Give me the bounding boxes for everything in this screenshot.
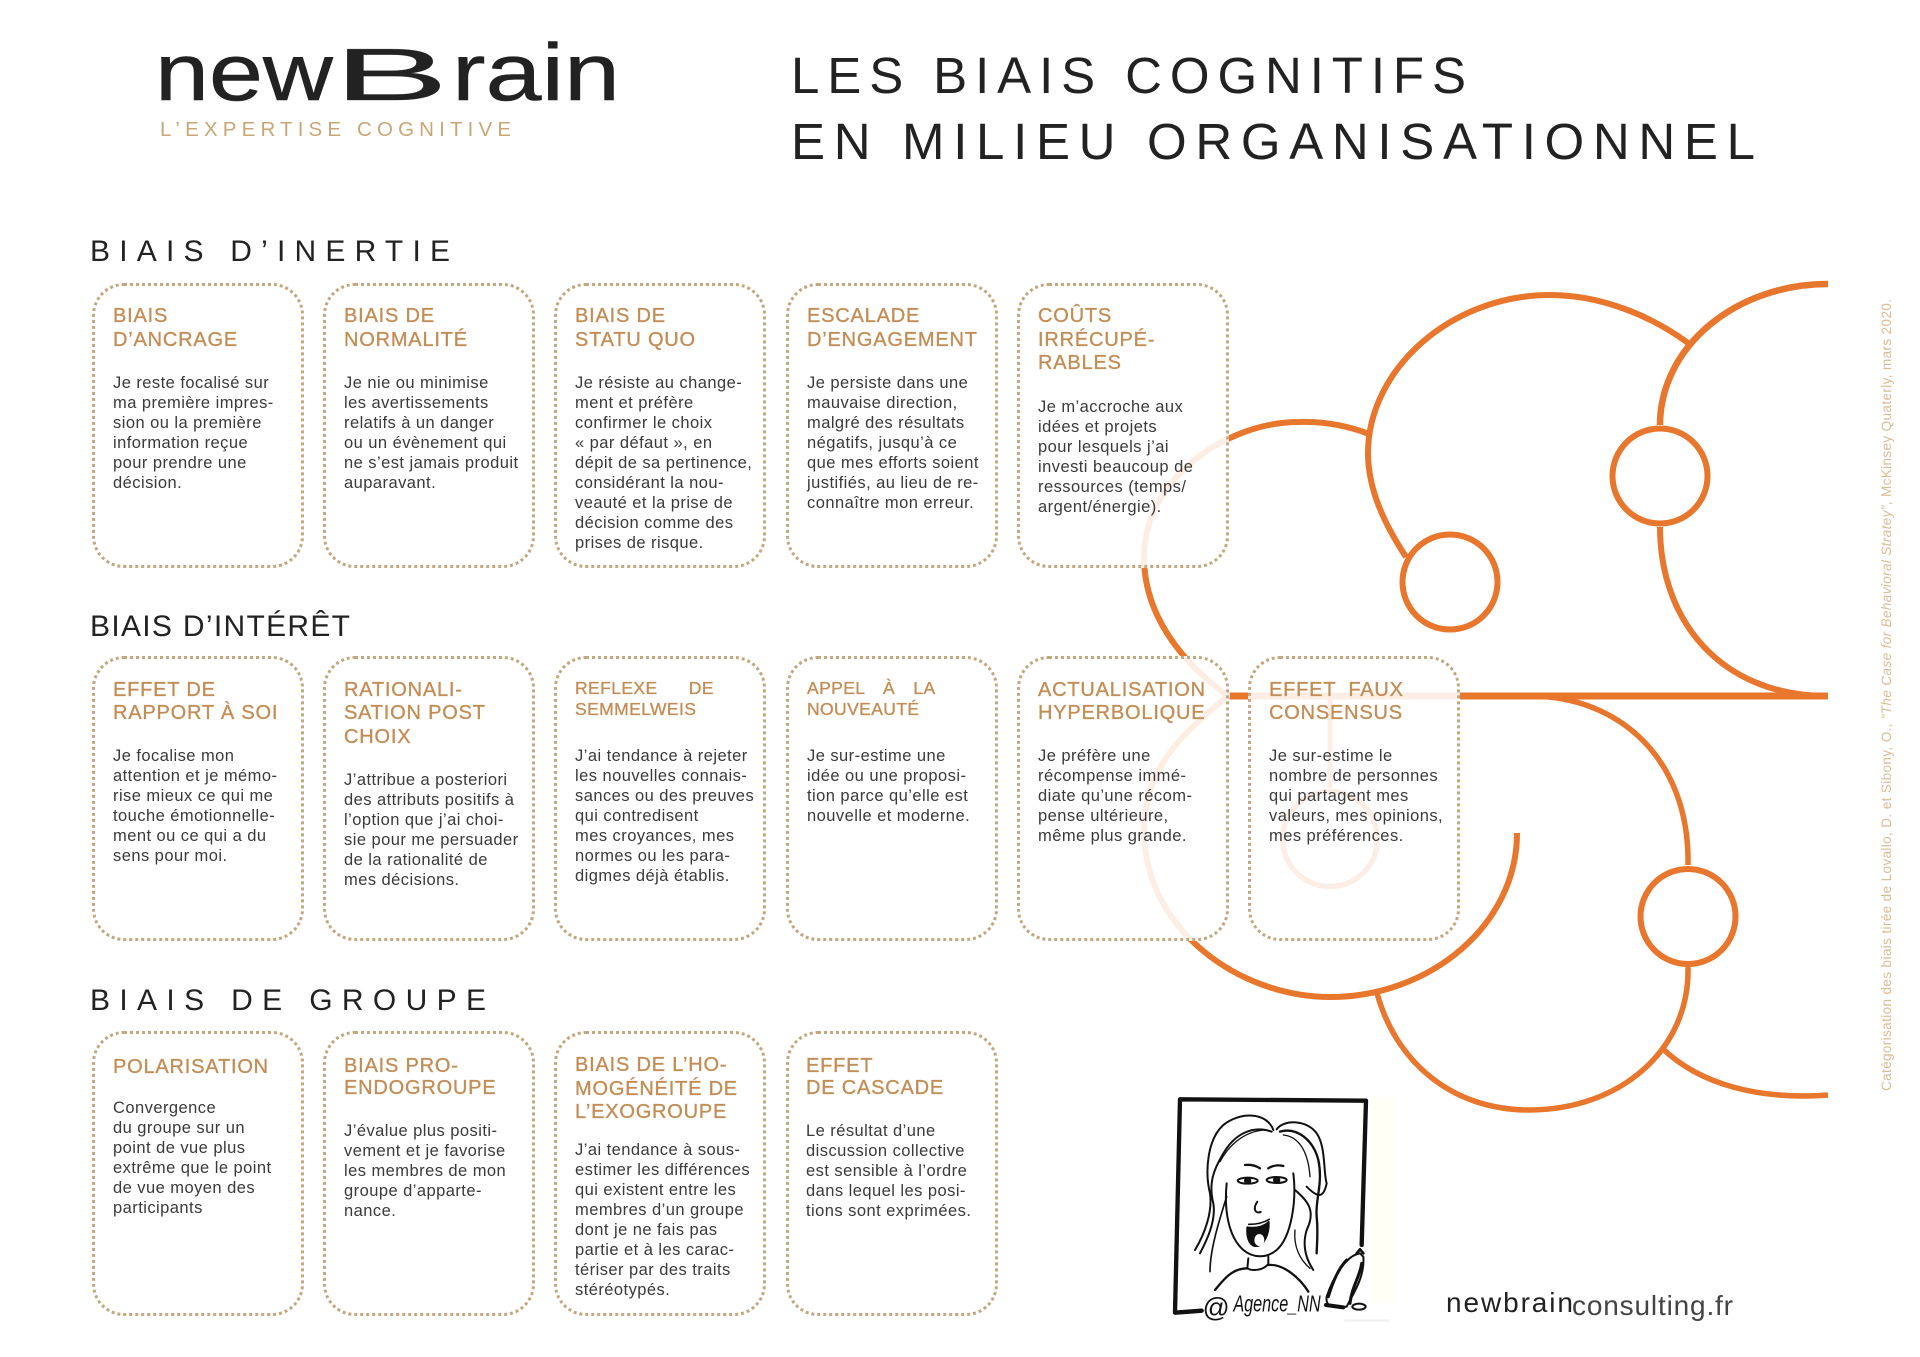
card title	[1269, 678, 1404, 724]
card text: point de vue plus	[113, 1138, 245, 1156]
card title: BIAIS DE	[344, 305, 435, 327]
card text: mes décisions.	[344, 871, 459, 889]
card title: EFFET FAUX	[1269, 678, 1404, 700]
card text	[575, 747, 754, 885]
card text: information reçue	[113, 434, 248, 452]
panel: effet faux consensus	[1248, 656, 1460, 941]
card text: ma première impres-	[113, 394, 274, 412]
card text: membres d’un groupe	[575, 1200, 744, 1218]
card title	[1038, 304, 1155, 374]
card text	[344, 1122, 506, 1220]
card text: ment ou ce qui a du	[113, 827, 266, 845]
card text: groupe d’apparte-	[344, 1182, 482, 1200]
card title: REFLEXE DE	[575, 678, 714, 698]
main title: LES BIAIS COGNITIFS	[791, 47, 1466, 104]
logo: newBrain: B	[333, 34, 449, 116]
heading: biais d'inertie: BIAIS D’INERTIE	[90, 235, 450, 268]
card title: D’ENGAGEMENT	[807, 329, 978, 351]
card text	[344, 374, 519, 492]
card title: IRRÉCUPÉ-	[1038, 329, 1155, 351]
card text: considérant la nou-	[575, 474, 724, 492]
card text: valeurs, mes opinions,	[1269, 807, 1443, 825]
card text: idées et projets	[1038, 418, 1157, 436]
logo tagline: L’EXPERTISE COGNITIVE	[160, 118, 511, 141]
card title: BIAIS DE	[575, 305, 666, 327]
card text: estimer les différences	[575, 1160, 750, 1178]
card text: de la rationalité de	[344, 851, 488, 869]
card text: relatifs à un danger	[344, 414, 494, 432]
card title	[344, 305, 468, 351]
card text: Convergence	[113, 1098, 216, 1116]
card text: « par défaut », en	[575, 434, 712, 452]
panel: biais de normalité	[323, 282, 535, 568]
card text: sances ou des preuves	[575, 787, 754, 805]
card title: NORMALITÉ	[344, 329, 468, 351]
card text: diate qu’une récom-	[1038, 787, 1192, 805]
card text	[806, 1122, 971, 1220]
card text: mes croyances, mes	[575, 827, 734, 845]
card text: connaître mon erreur.	[807, 494, 974, 512]
card title: SEMMELWEIS	[575, 699, 696, 719]
card title: L’EXOGROUPE	[575, 1101, 727, 1123]
panel: escalade d'engagement	[786, 282, 998, 568]
card text: nombre de personnes	[1269, 767, 1438, 785]
card title: D’ANCRAGE	[113, 329, 238, 351]
card title: EFFET	[806, 1054, 873, 1076]
card text: vement et je favorise	[344, 1142, 506, 1160]
card text: dans lequel les posi-	[806, 1182, 966, 1200]
main title	[791, 47, 1755, 170]
card text: malgré des résultats	[807, 414, 965, 432]
source note, vertical: Catégorisation des biais tirée de Lovallo, D. et Sibony, O., “The Case for Behavioral Stratey”, McKinsey Quaterly, mars 2020.	[1879, 299, 1894, 1091]
card text: est sensible à l’ordre	[806, 1162, 967, 1180]
panel: biais de l'homogénéité de l'exogroupe	[554, 1031, 766, 1316]
card text: mauvaise direction,	[807, 394, 958, 412]
card text: Je sur-estime le	[1269, 747, 1393, 765]
card title	[807, 305, 978, 351]
portrait illustration @Agence_NN: @	[1203, 1293, 1230, 1323]
card text: que mes efforts soient	[807, 454, 979, 472]
card text: partie et à les carac-	[575, 1240, 734, 1258]
card text: de vue moyen des	[113, 1178, 255, 1196]
card text: justifiés, au lieu de re-	[807, 474, 979, 492]
card text: dépit de sa pertinence,	[575, 454, 752, 472]
card text: ment et préfère	[575, 394, 694, 412]
card text: Je nie ou minimise	[344, 374, 489, 392]
card title	[113, 305, 238, 351]
panel: reflexe de semmelweis	[554, 656, 766, 941]
card text: rise mieux ce qui me	[113, 787, 273, 805]
card text: des attributs positifs à	[344, 791, 514, 809]
card title: ESCALADE	[807, 305, 920, 327]
card text: sion ou la première	[113, 414, 262, 432]
panel: appel à la nouveauté	[786, 656, 998, 941]
card text: tion parce qu’elle est	[807, 787, 968, 805]
card title	[1038, 678, 1206, 724]
card title: ENDOGROUPE	[344, 1076, 496, 1098]
card title	[344, 1054, 496, 1098]
card title: CHOIX	[344, 726, 411, 748]
card title	[575, 1054, 738, 1123]
card text	[1269, 747, 1443, 845]
card text: ressources (temps/	[1038, 478, 1186, 496]
card title: BIAIS PRO-	[344, 1054, 459, 1076]
card title: EFFET DE	[113, 678, 216, 700]
card text: qui existent entre les	[575, 1180, 736, 1198]
card text	[1038, 398, 1193, 516]
panel: biais pro-endogroupe	[323, 1031, 535, 1316]
card text: Je préfère une	[1038, 747, 1151, 765]
website address: newbrain	[1446, 1287, 1573, 1318]
main title: EN MILIEU ORGANISATIONNEL	[791, 113, 1755, 170]
card title: BIAIS DE L’HO-	[575, 1054, 727, 1076]
portrait illustration @Agence_NN: Agence_NN	[1232, 1291, 1321, 1317]
card text: qui contredisent	[575, 807, 699, 825]
card text	[113, 374, 274, 492]
card title: NOUVEAUTÉ	[807, 699, 920, 719]
card text: les avertissements	[344, 394, 489, 412]
card text: Le résultat d’une	[806, 1122, 936, 1140]
card title: COÛTS	[1038, 305, 1112, 327]
card title	[344, 678, 486, 748]
card text: sens pour moi.	[113, 847, 228, 865]
card title: POLARISATION	[113, 1056, 269, 1078]
card text: stéréotypés.	[575, 1280, 670, 1298]
panel: effet de rapport à soi	[92, 656, 304, 941]
logo: newBrain	[155, 28, 620, 118]
card text: pour lesquels j’ai	[1038, 438, 1169, 456]
card title: DE CASCADE	[806, 1076, 944, 1098]
card text: J’évalue plus positi-	[344, 1122, 497, 1140]
card text: décision.	[113, 474, 182, 492]
card text: veauté et la prise de	[575, 494, 733, 512]
card title	[575, 678, 714, 719]
card text: normes ou les para-	[575, 847, 730, 865]
card text: décision comme des	[575, 514, 734, 532]
card text: J’attribue a posteriori	[344, 771, 508, 789]
card title	[113, 678, 278, 724]
card text: pour prendre une	[113, 454, 247, 472]
card text: discussion collective	[806, 1142, 965, 1160]
card title: CONSENSUS	[1269, 702, 1403, 724]
card text: J’ai tendance à sous-	[575, 1140, 740, 1158]
card title: HYPERBOLIQUE	[1038, 702, 1205, 724]
card text: prises de risque.	[575, 534, 704, 552]
card text: idée ou une proposi-	[807, 767, 966, 785]
card text: ou un évènement qui	[344, 434, 507, 452]
card text: même plus grande.	[1038, 827, 1187, 845]
card text: extrême que le point	[113, 1158, 272, 1176]
card text: du groupe sur un	[113, 1118, 245, 1136]
panel: biais d'ancrage	[92, 282, 304, 568]
card text	[575, 1140, 750, 1298]
orange brain line illustration	[1144, 284, 1828, 1110]
card text: sie pour me persuader	[344, 831, 519, 849]
card text	[113, 747, 277, 865]
card text: ne s’est jamais produit	[344, 454, 519, 472]
card text: Je persiste dans une	[807, 374, 968, 392]
card text	[113, 1098, 272, 1216]
card title: SATION POST	[344, 702, 486, 724]
card text	[575, 374, 752, 552]
card text	[806, 374, 979, 512]
card text: dont je ne fais pas	[575, 1220, 717, 1238]
card text: Je résiste au change-	[575, 374, 742, 392]
card title: RABLES	[1038, 352, 1122, 374]
card title	[806, 1054, 944, 1098]
card text: investi beaucoup de	[1038, 458, 1193, 476]
card text	[1038, 747, 1192, 845]
panel: polarisation	[92, 1031, 304, 1316]
card text: nance.	[344, 1202, 396, 1220]
logo: newBrain: rain	[452, 28, 620, 118]
heading: biais d'intérêt: BIAIS D’INTÉRÊT	[90, 610, 350, 643]
card text: les nouvelles connais-	[575, 767, 747, 785]
panel: effet de cascade	[786, 1031, 998, 1316]
card title: ACTUALISATION	[1038, 678, 1206, 700]
card text: Je sur-estime une	[807, 747, 946, 765]
card text	[807, 747, 970, 825]
card text: tions sont exprimées.	[806, 1202, 971, 1220]
panel: biais de statu quo	[554, 282, 766, 568]
card text: les membres de mon	[344, 1162, 506, 1180]
card title: STATU QUO	[575, 329, 696, 351]
card text: nouvelle et moderne.	[807, 807, 970, 825]
card text: confirmer le choix	[575, 414, 712, 432]
card text: Je m’accroche aux	[1038, 398, 1183, 416]
card text: digmes déjà établis.	[575, 867, 730, 885]
portrait illustration @Agence_NN	[1175, 1097, 1395, 1323]
card text: auparavant.	[344, 474, 436, 492]
card text: argent/énergie).	[1038, 498, 1162, 516]
card title: RATIONALI-	[344, 678, 463, 700]
card text: récompense immé-	[1038, 767, 1186, 785]
panel: rationalisation post choix	[323, 656, 535, 941]
card text: mes préférences.	[1269, 827, 1404, 845]
heading: biais de groupe: BIAIS DE GROUPE	[90, 984, 486, 1017]
card title: MOGÉNÉITÉ DE	[575, 1078, 738, 1100]
card text: tériser par des traits	[575, 1260, 731, 1278]
card text: participants	[113, 1198, 203, 1216]
card title	[575, 305, 696, 351]
card text: l’option que j’ai choi-	[344, 811, 504, 829]
card text: qui partagent mes	[1269, 787, 1409, 805]
card text: négatifs, jusqu’à ce	[807, 434, 957, 452]
card title: BIAIS	[113, 305, 168, 327]
card text: pense ultérieure,	[1038, 807, 1169, 825]
card title: RAPPORT À SOI	[113, 702, 278, 724]
card text: Je reste focalisé sur	[113, 374, 269, 392]
website address: consulting.fr	[1572, 1290, 1733, 1321]
card text: attention et je mémo-	[113, 767, 277, 785]
card text: touche émotionnelle-	[113, 807, 275, 825]
card text: J’ai tendance à rejeter	[575, 747, 748, 765]
card title	[806, 678, 936, 719]
panel: coûts irrécupérables	[1017, 282, 1229, 568]
card text: Je focalise mon	[113, 747, 234, 765]
card text	[344, 771, 519, 889]
logo: newBrain: new	[155, 28, 334, 118]
card title: APPEL À LA	[807, 678, 936, 698]
panel: actualisation hyperbolique	[1017, 656, 1229, 941]
